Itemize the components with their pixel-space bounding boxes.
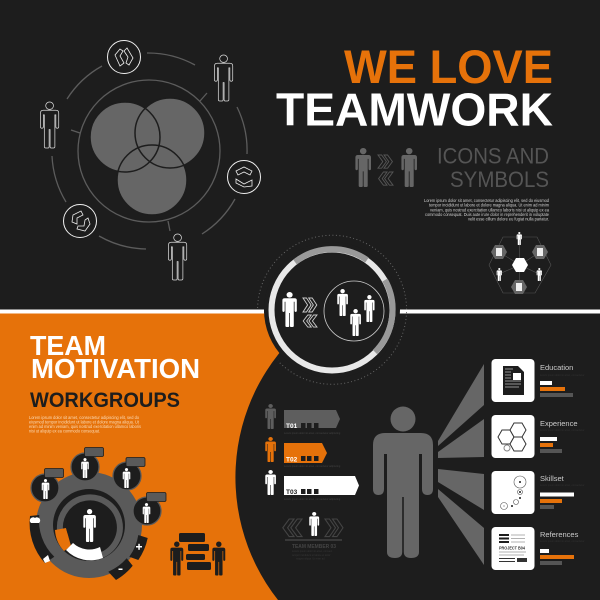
lorem paragraph left [29, 415, 141, 434]
venn diagram cycle [40, 40, 261, 280]
card: references [492, 527, 585, 570]
white segment [66, 543, 103, 560]
card: education: Education [540, 363, 573, 372]
team member 03: Lorem ipsum dolor sit amet, consect [292, 550, 332, 553]
card: references: References [540, 530, 579, 539]
lorem paragraph left: enim ad minim veniam, quis nostrud exercitation ullamco laboris [29, 424, 141, 429]
T01 row: Lorem ipsum dolor sit amet, consectetur adipiscing [284, 432, 341, 435]
team member 03 [283, 512, 343, 560]
lorem paragraph top: velit esse cillum dolore eu fugiat nulla pariatur. [468, 216, 549, 222]
central circle [258, 235, 407, 384]
orange segment [55, 528, 71, 551]
subtitle: ICONS AND [437, 144, 549, 168]
team member 03: tempor incididunt ut labore et dolor [292, 554, 331, 557]
team member 03: TEAM MEMBER 03 [292, 544, 336, 550]
T01 row [265, 404, 341, 435]
card: references: Lorem ipsum dolor sit amet, consectetur [540, 540, 585, 543]
card: experience: Experience [540, 419, 578, 428]
team motivation heading: TEAM [30, 330, 106, 361]
card: education: Lorem ipsum dolor sit amet, consectetur [540, 374, 585, 377]
title: TEAMWORK [276, 84, 553, 136]
team motivation heading [30, 330, 200, 412]
icon: document [503, 366, 524, 395]
T02 row: T02 [286, 456, 298, 464]
card: experience: Lorem ipsum dolor sit amet, consectetur [540, 429, 585, 432]
T02 row [265, 437, 341, 468]
icon: skill path [500, 476, 526, 510]
lorem paragraph top: tempor incididunt ut labore et dolore magna aliqua. Ut enim ad minim [429, 203, 549, 208]
lorem paragraph left: Lorem ipsum dolor sit amet, consectetur adipiscing elit, sed do [29, 415, 140, 420]
team motivation heading: WORKGROUPS [30, 388, 180, 412]
card: skillset [492, 471, 585, 514]
subtitle: SYMBOLS [450, 167, 549, 192]
team member 03: magna aliqua. Ut enim ad [296, 558, 325, 560]
team motivation heading: MOTIVATION [31, 353, 200, 384]
lorem paragraph top [424, 198, 549, 222]
title [276, 40, 553, 136]
title: WE LOVE [344, 40, 553, 93]
venn circles [90, 98, 205, 215]
lorem paragraph top: Lorem ipsum dolor sit amet, consectetur adipiscing elit, sed do eiusmod [424, 198, 549, 203]
dial symbols [30, 517, 142, 570]
icon: project sheet: PROJECT B04 [499, 546, 525, 552]
T02 row: Lorem ipsum dolor sit amet, consectetur adipiscing [284, 465, 341, 468]
icon: hexagons [498, 423, 526, 451]
T03 row [265, 470, 359, 501]
inner ring and arcs [52, 53, 247, 249]
T01 row: T01 [286, 423, 298, 430]
large person [373, 406, 433, 558]
satellite discs [31, 453, 161, 525]
people exchange icon [355, 148, 417, 187]
card: education [492, 359, 585, 402]
lorem paragraph top: veniam, quis nostrud exercitation ullamco laboris nisi ut aliquip ex ea [430, 207, 549, 212]
T03 row: Lorem ipsum dolor sit amet, consectetur adipiscing [284, 498, 341, 501]
two people talking [170, 533, 225, 576]
subtitle [437, 144, 549, 192]
exchange icons [64, 40, 260, 238]
satellite people [42, 458, 150, 523]
speech tags [44, 448, 166, 502]
fan rays [438, 364, 484, 565]
card: experience [492, 415, 585, 458]
divider line right [399, 310, 600, 314]
lorem paragraph top: commodo consequat. Duis aute irure dolor in reprehenderit in voluptate [425, 212, 549, 217]
workgroup dial [30, 448, 166, 580]
lorem paragraph left: eiusmod tempor incididunt ut labore et dolore magna aliqua. Ut [29, 420, 140, 424]
T03 row: T03 [286, 489, 298, 496]
card: skillset: Skillset [540, 474, 565, 483]
dial sectors [30, 515, 148, 580]
lorem paragraph left: nisi ut aliquip ex ea commodo consequat. [29, 428, 100, 434]
outlined people [40, 55, 233, 280]
team list [265, 404, 359, 501]
hexagon network [489, 232, 551, 294]
divider line left [0, 310, 264, 314]
orange panel [0, 313, 323, 600]
card: skillset: Lorem ipsum dolor sit amet, consectetur [540, 484, 585, 487]
